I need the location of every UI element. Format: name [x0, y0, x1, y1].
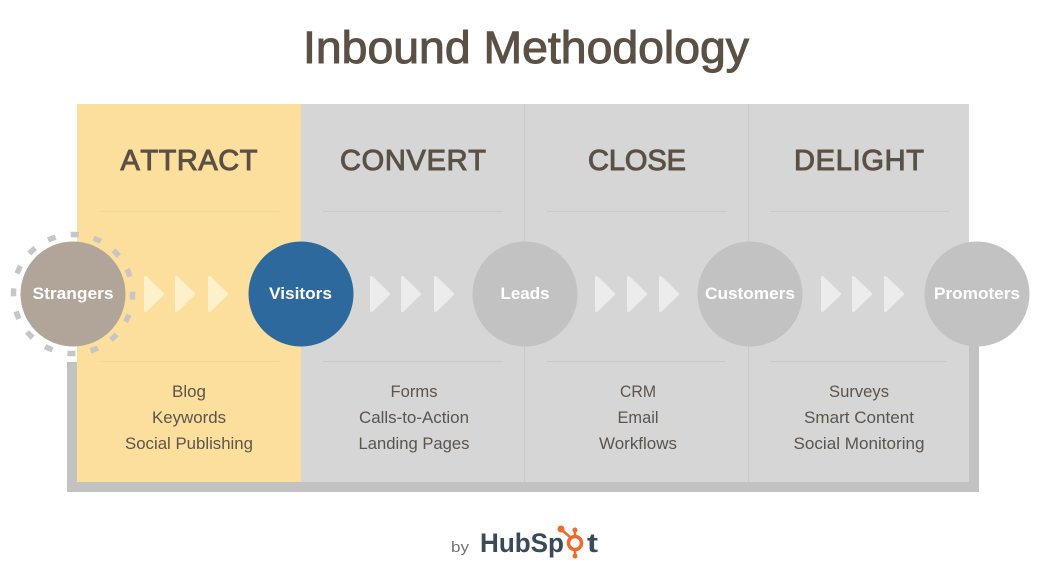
panel: delight [748, 104, 969, 482]
list: attract tools: Keywords [152, 409, 226, 427]
node: customers: Customers [705, 285, 795, 303]
list: attract tools: Blog [172, 383, 206, 401]
list: convert tools [358, 383, 470, 453]
list: close tools [599, 383, 677, 453]
wordmark: HubSp [480, 528, 564, 558]
list: convert tools: Calls-to-Action [359, 409, 469, 427]
dashed ring around strangers [14, 234, 132, 354]
list: delight tools [794, 383, 924, 453]
node: leads [472, 242, 578, 346]
list: convert tools: Landing Pages [358, 435, 470, 453]
node: promoters [924, 242, 1030, 346]
node: strangers: Strangers [32, 285, 114, 303]
node: promoters: Promoters [934, 285, 1020, 303]
byline: by HubSpot: by [451, 539, 470, 556]
list: attract tools: Social Publishing [125, 435, 253, 453]
icon: sprocket [558, 526, 582, 558]
arrows: leads to customers [596, 278, 678, 310]
panel: close [524, 104, 749, 482]
list: delight tools: Smart Content [804, 409, 914, 427]
list: convert tools: Forms [390, 383, 438, 401]
heading: close: CLOSE [588, 145, 686, 177]
title: Inbound Methodology [303, 22, 750, 73]
list: attract tools [125, 383, 253, 453]
node: visitors: Visitors [269, 285, 332, 303]
arrows: customers to promoters [822, 278, 902, 310]
arrows: strangers to visitors [146, 278, 226, 310]
node: strangers [20, 242, 126, 346]
heading: convert: CONVERT [340, 145, 486, 177]
node: visitors [248, 242, 354, 346]
node: customers [698, 242, 802, 346]
heading: delight: DELIGHT [794, 145, 924, 177]
panel: convert [301, 104, 525, 482]
arrows: visitors to leads [372, 278, 452, 310]
loop-back frame [67, 340, 979, 492]
panel: attract [77, 104, 301, 482]
byline: by HubSpot [451, 526, 598, 558]
list: close tools: Email [618, 409, 658, 427]
list: delight tools: Surveys [829, 383, 889, 401]
node: leads: Leads [500, 285, 550, 303]
byline: by HubSpot: t [587, 528, 598, 558]
list: close tools: CRM [620, 383, 656, 401]
list: close tools: Workflows [599, 435, 677, 453]
heading: attract: ATTRACT [120, 145, 258, 177]
list: delight tools: Social Monitoring [794, 435, 924, 453]
